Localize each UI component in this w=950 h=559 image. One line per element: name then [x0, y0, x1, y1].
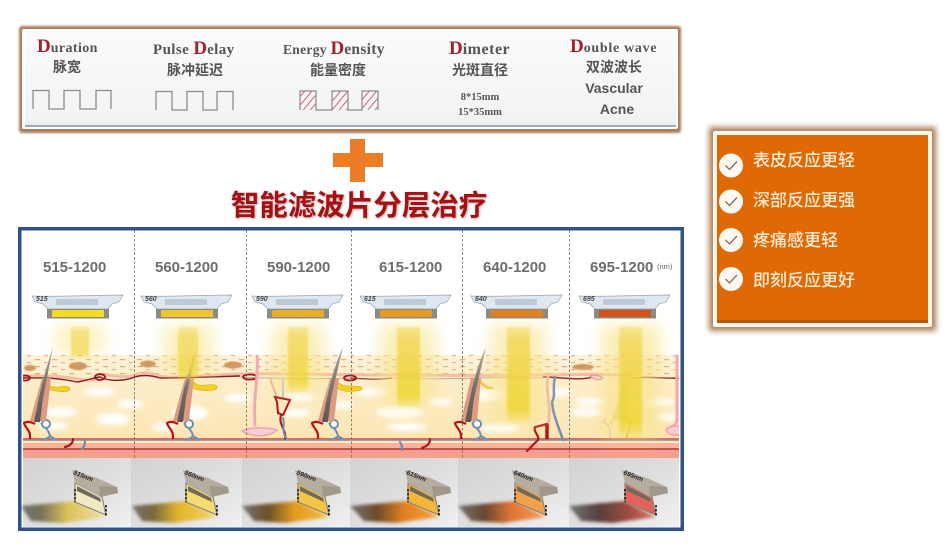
parameter: pulse delay: 脉冲延迟 — [167, 62, 223, 78]
parameter: double wave — [570, 36, 657, 117]
hair follicle 2 — [167, 347, 200, 440]
beam: 640 — [490, 325, 546, 422]
filter head: 590: 590 — [256, 296, 268, 303]
photo: 560 filter — [131, 458, 242, 527]
filter head: 560 — [141, 295, 232, 318]
light beams — [55, 325, 660, 438]
beam: 615 — [380, 325, 436, 407]
filter head: 515 — [32, 295, 123, 318]
parameter: double wave: Vascular — [585, 80, 643, 96]
beam: 560 — [163, 325, 213, 380]
wavelength labels: 640-1200 — [483, 259, 546, 276]
connector vessels — [65, 439, 430, 450]
parameter: energy density: Energy Density — [283, 38, 385, 59]
panel: filter treatment diagram — [20, 229, 682, 529]
dermal vessels — [242, 356, 680, 451]
parameter: energy density — [283, 38, 385, 110]
parameter: diameter: 15*35mm — [458, 107, 502, 118]
beam: 515 — [55, 325, 105, 358]
beam: 590 — [272, 325, 324, 392]
photo: 515 filter: 515nm — [72, 469, 94, 484]
hair follicle 4 — [455, 347, 488, 440]
panel: parameter bar — [19, 26, 681, 133]
filter head: 615 — [360, 295, 451, 318]
parameter: double wave: Double wave — [570, 36, 657, 57]
photo: 615 filter — [350, 458, 458, 527]
wavelength labels: 515-1200 — [43, 259, 106, 276]
parameter: double wave: 双波波长 — [586, 59, 642, 75]
hair follicle 3 — [312, 347, 345, 440]
icon: plus sign — [333, 139, 383, 182]
waveform: pulse delay — [156, 92, 233, 110]
benefit 3: 疼痛感更轻 — [753, 231, 838, 250]
pink lower skin layer — [23, 440, 679, 458]
benefit 3 — [719, 228, 838, 252]
parameter: diameter — [449, 38, 510, 118]
filter head: 515: 515 — [36, 296, 48, 303]
pigment clusters — [24, 360, 594, 371]
parameter: pulse delay: Pulse Delay — [153, 38, 235, 59]
benefit 4: 即刻反应更好 — [753, 271, 855, 290]
faded hair follicle under 695 beam — [602, 362, 632, 438]
benefit 1: 表皮反应更轻 — [753, 151, 855, 170]
dashed column dividers — [134, 230, 570, 458]
wavelength labels: 695-1200 — [590, 259, 653, 276]
oil glands — [41, 381, 493, 392]
waveform: energy density — [300, 91, 378, 110]
parameter: pulse delay — [153, 38, 235, 110]
photo: 590 filter — [242, 458, 350, 527]
benefit 4 — [719, 267, 855, 291]
skin cross-section illustration — [20, 347, 680, 458]
parameter: energy density: 能量密度 — [310, 62, 366, 78]
wavelength labels: 615-1200 — [379, 259, 442, 276]
loops — [20, 374, 356, 380]
filter head: 640 — [471, 295, 562, 318]
filter head: 590 — [252, 295, 343, 318]
parameter: double wave: Acne — [600, 101, 634, 117]
photo: 640 filter: 640nm — [512, 469, 534, 484]
photo: 615 filter: 615nm — [405, 469, 427, 484]
photo: 640 filter — [458, 458, 569, 527]
filter head: 560: 560 — [145, 296, 157, 303]
title: 智能滤波片分层治疗 — [231, 190, 487, 222]
wavelength labels: (nm) — [657, 262, 673, 271]
benefit 1 — [719, 151, 855, 178]
parameter: diameter: 8*15mm — [461, 92, 499, 103]
wavelength labels: 590-1200 — [267, 259, 330, 276]
parameter: duration: 脉宽 — [53, 59, 81, 75]
wavelength labels: 560-1200 — [155, 259, 218, 276]
parameter: diameter: Dimeter — [449, 38, 510, 59]
beam: 695 — [602, 325, 660, 438]
photo: 590 filter: 590nm — [295, 469, 317, 484]
hair follicle 1 — [24, 347, 57, 440]
skin surface line — [23, 373, 633, 380]
filter head: 695: 695 — [583, 296, 595, 303]
photo: 695 filter — [569, 458, 679, 527]
parameter: diameter: 光斑直径 — [452, 62, 508, 78]
parameter: duration: Duration — [37, 36, 98, 57]
wavelength labels — [43, 259, 673, 276]
waveform: duration — [33, 90, 111, 109]
filter head: 695 — [579, 295, 670, 318]
parameter: duration — [33, 36, 111, 109]
photo: 515 filter — [21, 458, 131, 527]
benefit 2: 深部反应更强 — [753, 191, 855, 210]
photo: 560 filter: 560nm — [183, 469, 205, 484]
filter head: 640: 640 — [475, 296, 487, 303]
filter head: 615: 615 — [364, 296, 376, 303]
benefit 2 — [719, 190, 855, 214]
panel: benefits — [709, 127, 936, 331]
photo: 695 filter: 695nm — [622, 469, 644, 484]
